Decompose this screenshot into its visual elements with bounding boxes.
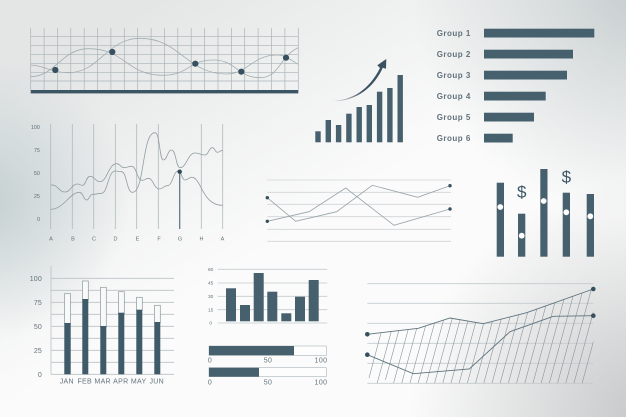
month labels: JAN (60, 379, 74, 386)
y axis labels: 30 (208, 294, 214, 300)
data dots (52, 49, 289, 75)
filled bars (64, 299, 160, 374)
icon: dollar signs: $ (562, 168, 572, 187)
group bars (484, 29, 594, 143)
group labels: Group 1 (437, 29, 471, 38)
x axis labels: H (200, 236, 204, 242)
panel: progress bars (208, 346, 327, 386)
panel: vertical bars with dollar signs (497, 168, 594, 257)
panel: hatched area line chart (365, 283, 596, 384)
y axis labels: 15 (208, 307, 214, 313)
month labels: JUN (149, 379, 164, 386)
y axis labels: 100 (31, 125, 40, 131)
progress bar 1 (208, 346, 327, 364)
month labels: APR (113, 379, 128, 386)
y axis labels (30, 276, 42, 379)
y axis labels: 45 (208, 281, 214, 287)
y axis labels (31, 125, 40, 223)
group labels: Group 6 (437, 134, 471, 143)
month labels (60, 379, 164, 386)
baseline bar (31, 90, 298, 93)
y axis labels (208, 267, 214, 327)
x axis labels: G (178, 236, 182, 242)
panel: small column chart (208, 267, 327, 327)
y axis labels: 75 (34, 148, 40, 154)
y axis labels: 0 (209, 321, 212, 327)
line end dots (266, 184, 452, 223)
x axis labels: A (221, 236, 225, 242)
x axis labels: A (49, 236, 53, 242)
x axis labels: D (114, 236, 118, 242)
month labels: MAY (131, 379, 146, 386)
y axis labels: 50 (34, 324, 42, 331)
y axis labels: 0 (38, 372, 42, 379)
y axis labels: 50 (34, 171, 40, 177)
progress bar 1: 0 (208, 357, 212, 364)
icon: dollar signs (517, 168, 572, 202)
marker at G (178, 170, 182, 229)
group labels: Group 2 (437, 50, 471, 59)
y axis labels: 75 (34, 300, 42, 307)
x axis labels (49, 236, 225, 242)
progress bar 2: 0 (208, 379, 212, 386)
x axis labels: F (157, 236, 161, 242)
panel: straight line chart (266, 180, 452, 241)
x axis labels: B (71, 236, 75, 242)
icon: dollar signs: $ (517, 183, 527, 202)
progress bar 1: 100 (315, 357, 327, 364)
y axis labels: 100 (30, 276, 42, 283)
hatching (368, 290, 594, 383)
x axis labels: E (136, 236, 140, 242)
progress bar 1: 50 (264, 357, 272, 364)
y axis labels: 25 (34, 194, 40, 200)
group labels: Group 4 (437, 92, 471, 101)
group labels (437, 29, 471, 143)
progress bar 2: 100 (315, 379, 327, 386)
group labels: Group 5 (437, 113, 471, 122)
y axis labels: 0 (37, 217, 40, 223)
line end dots (365, 287, 596, 357)
month labels: MAR (94, 379, 111, 386)
group labels: Group 3 (437, 71, 471, 80)
panel: stacked monthly bar chart (30, 266, 174, 386)
panel: group horizontal bars (437, 29, 594, 143)
panel: wavy line chart A to A (31, 124, 225, 242)
white markers (497, 198, 593, 239)
month labels: FEB (77, 379, 92, 386)
panel: growth bars with arrow (315, 59, 403, 142)
y axis labels: 25 (34, 348, 42, 355)
x axis labels: C (92, 236, 96, 242)
progress bar 2: 50 (264, 379, 272, 386)
outlined bar tops (64, 281, 160, 327)
y axis labels: 60 (208, 267, 214, 273)
progress bar 2 (208, 368, 327, 386)
panel: grid line chart with dots (31, 28, 298, 93)
icon: rising arrow (332, 59, 386, 101)
